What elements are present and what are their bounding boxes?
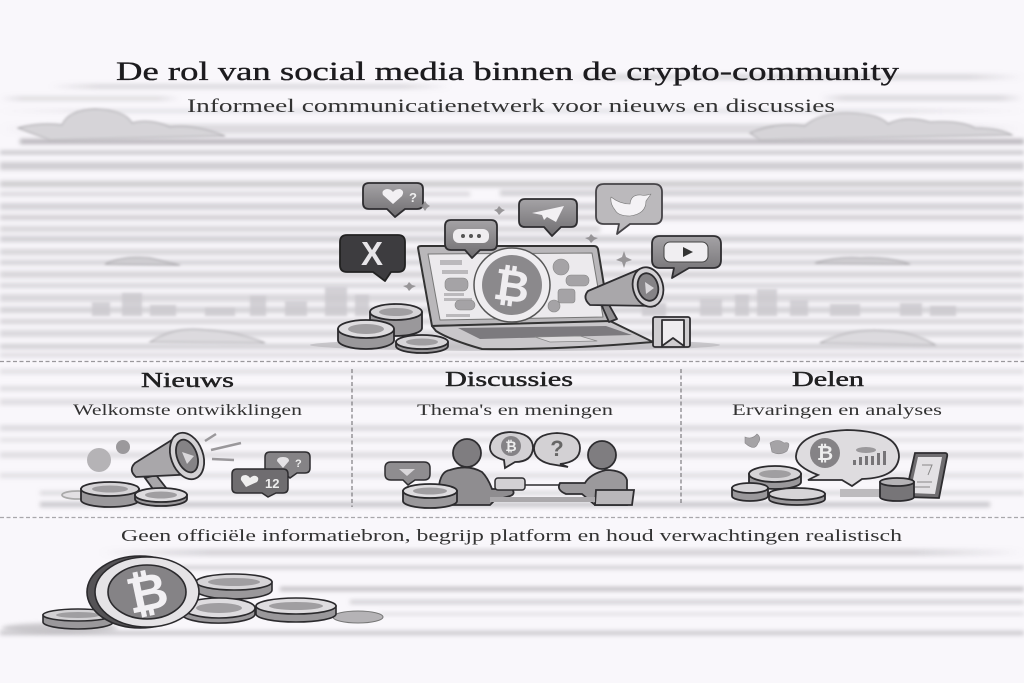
illustration: bitcoin coin pile xyxy=(2,556,383,633)
icon: twitter bubble xyxy=(596,184,662,234)
icon: bitcoin speech bubble: ₿ xyxy=(505,439,517,455)
icon: analysis speech bubble xyxy=(796,430,899,486)
icon: discussies heart bubble xyxy=(385,462,430,485)
icon: heart bubble: ? xyxy=(409,190,417,205)
icon: telegram bubble xyxy=(519,199,577,236)
heading: discussies: Discussies xyxy=(445,367,573,391)
icon: nieuws like bubbles: 12 xyxy=(265,476,279,491)
icon: chat bubble xyxy=(445,220,497,258)
icon: nieuws megaphone xyxy=(132,428,210,489)
icon: analysis speech bubble: ₿ xyxy=(817,441,833,465)
icon: right person xyxy=(559,441,634,505)
ground shadow xyxy=(310,339,720,351)
text: nieuws description: Welkomste ontwikklingen xyxy=(73,402,302,419)
subtitle: Informeel communicatienetwerk voor nieuws en discussies xyxy=(187,97,835,117)
title: De rol van social media binnen de crypto-community xyxy=(116,57,899,86)
icon: delen coins xyxy=(732,466,914,505)
icon: nieuws like bubbles: ? xyxy=(295,458,302,470)
panel dividers xyxy=(0,362,1024,518)
icon: nieuws coins xyxy=(62,482,187,507)
icon: megaphone xyxy=(585,264,668,322)
icon: nieuws decorative badges xyxy=(87,434,241,472)
panel: discussies xyxy=(385,367,634,508)
icon: bitcoin speech bubble xyxy=(490,432,533,468)
panel: delen xyxy=(732,367,947,505)
icon: table xyxy=(490,478,595,502)
text: delen description: Ervaringen en analyses xyxy=(732,402,942,419)
icon: coin stacks xyxy=(338,304,448,353)
heading: delen: Delen xyxy=(792,367,865,391)
hero illustration xyxy=(310,183,721,353)
icon: bookmark xyxy=(653,317,690,347)
icon: discussies coins xyxy=(403,484,457,508)
icon: floating hearts xyxy=(745,434,789,454)
icon: question speech bubble xyxy=(534,433,580,467)
panel: nieuws xyxy=(62,368,310,507)
icon: bitcoin coin on screen xyxy=(474,248,550,322)
icon: video bubble xyxy=(652,236,721,278)
heading: nieuws: Nieuws xyxy=(141,368,234,392)
icon: nieuws like bubbles xyxy=(232,452,310,497)
icon: left person xyxy=(438,439,514,505)
icon: laptop xyxy=(418,246,653,349)
icon: heart bubble xyxy=(363,183,423,217)
decorative clouds and skylines xyxy=(18,109,1012,345)
icon: bitcoin coin on screen: ₿ xyxy=(490,259,533,314)
text: discussies description: Thema's en meningen xyxy=(417,402,613,419)
icon: question speech bubble: ? xyxy=(550,436,564,461)
icon: X bubble: X xyxy=(361,235,383,272)
decorative sparkles xyxy=(403,201,632,291)
illustration: bitcoin coin pile: ₿ xyxy=(121,560,173,626)
footer note: Geen officiële informatiebron, begrijp platform en houd verwachtingen realistisch xyxy=(121,526,903,545)
icon: delen tablet xyxy=(905,453,947,498)
icon: X bubble xyxy=(340,235,405,281)
